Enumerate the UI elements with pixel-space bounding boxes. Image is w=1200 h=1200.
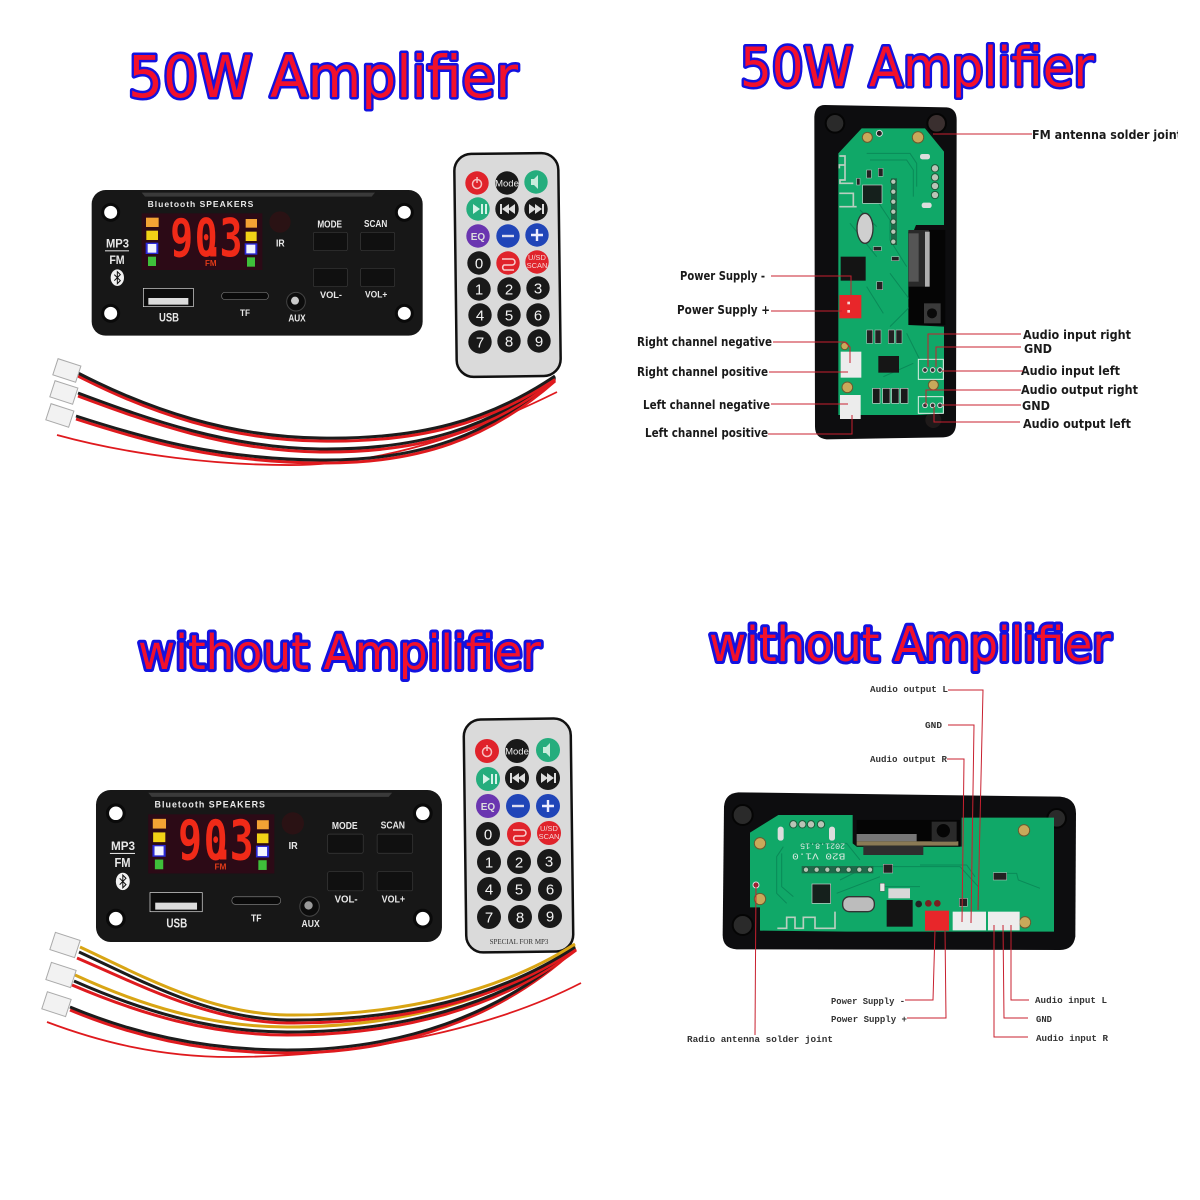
panel: 50W remote control: 8 — [505, 334, 513, 350]
display: 90.3 FM: FM — [214, 861, 227, 871]
callouts: 50W board pin labels: Audio input right — [1023, 327, 1131, 342]
panel: without-amplifier module front: TF — [251, 913, 262, 924]
sd card slot — [908, 230, 945, 325]
panel: without-amplifier remote control: 8 — [516, 910, 524, 926]
display: 90.3 FM — [142, 207, 262, 270]
display: 90.3 FM: 90.3 — [170, 207, 243, 269]
panel: 50W module front: MP3 — [106, 237, 129, 250]
callouts: 50W board pin labels: Left channel positive — [645, 425, 768, 440]
display: 90.3 FM: 90.3 — [178, 810, 254, 873]
callouts: without-amplifier board pin labels: GND — [925, 720, 942, 731]
panel: 50W module front: AUX — [288, 313, 306, 324]
callouts: 50W board pin labels — [637, 127, 1182, 440]
icon: bluetooth — [116, 873, 130, 890]
panel: 50W module front: FM — [109, 253, 125, 267]
callouts: without-amplifier board pin labels: Audio input L — [1035, 995, 1107, 1006]
title: 50W Amplifier (right): 50W Amplifier — [740, 36, 1095, 99]
panel: without-amplifier module front — [96, 790, 442, 942]
callouts: without-amplifier board pin labels: Audio output L — [870, 684, 948, 695]
panel: without-amplifier remote control: 4 — [485, 882, 493, 898]
panel: without-amplifier remote control: 5 — [515, 882, 523, 898]
panel: without-amplifier module front: VOL+ — [382, 894, 405, 905]
panel: 50W remote control: 7 — [476, 334, 484, 352]
panel: without-amplifier remote control: U/SD — [540, 824, 559, 833]
panel: without-amplifier module front: SCAN — [381, 821, 405, 832]
sd card slot — [857, 820, 960, 855]
panel: 50W remote control: Mode — [495, 178, 519, 190]
display: 90.3 FM: FM — [205, 259, 217, 268]
callouts: 50W board pin labels: Power Supply + — [677, 302, 770, 317]
panel: 50W module front: VOL+ — [365, 290, 388, 300]
panel: 50W module front: SCAN — [364, 219, 387, 230]
panel: 50W remote control: 4 — [476, 308, 484, 324]
panel: without-amplifier module front: FM — [114, 855, 130, 870]
callouts: 50W board pin labels: Audio output right — [1021, 382, 1138, 397]
title: 50W Amplifier (left): 50W Amplifier — [128, 43, 518, 111]
cable set: 50W wires — [46, 359, 557, 465]
callouts: 50W board pin labels: GND — [1024, 341, 1052, 356]
panel: 50W remote control: 2 — [505, 282, 513, 298]
panel: without-amplifier remote control: 0 — [484, 826, 492, 844]
callouts: 50W board pin labels: Right channel positive — [637, 364, 768, 379]
panel: without-amplifier remote control: 6 — [546, 882, 554, 898]
panel: without-amplifier module front: USB — [166, 915, 187, 930]
panel: 50W remote control: 5 — [505, 308, 513, 324]
panel: without-amplifier module front: MODE — [332, 821, 358, 832]
icon: bluetooth — [111, 269, 124, 286]
usb port — [143, 288, 193, 307]
panel: without-amplifier remote control: 9 — [546, 908, 554, 926]
callouts: 50W board pin labels: Left channel negative — [643, 397, 770, 412]
panel: without-amplifier module front: Bluetooth SPEAKERS — [155, 800, 266, 810]
panel: 50W module front: Bluetooth SPEAKERS — [148, 199, 254, 209]
panel: 50W remote control: SCAN — [527, 261, 547, 270]
title: without Ampilifier (right): without Ampilifier — [709, 617, 1111, 673]
panel: without-amplifier remote control: SPECIAL FOR MP3 — [490, 938, 549, 946]
callouts: without-amplifier board pin labels: Power Supply + — [831, 1014, 907, 1025]
callouts: 50W board pin labels: Right channel negative — [637, 334, 772, 349]
callouts: without-amplifier board pin labels: Audio input R — [1036, 1033, 1108, 1044]
panel: 50W module front — [92, 190, 423, 336]
callouts: 50W board pin labels: GND — [1022, 398, 1050, 413]
panel: 50W remote control: EQ — [471, 232, 485, 243]
panel: without-amplifier remote control: 3 — [545, 854, 553, 870]
panel: without-amplifier module front: VOL- — [335, 895, 358, 906]
panel: without-amplifier remote control: 7 — [485, 910, 493, 926]
panel: 50W module front: USB — [159, 311, 179, 325]
cable set: without-amplifier wires — [42, 932, 581, 1057]
callouts: without-amplifier board pin labels: Radio antenna solder joint — [687, 1034, 833, 1045]
callouts: without-amplifier board pin labels — [687, 684, 1108, 1045]
panel: without-amplifier board back — [723, 792, 1076, 950]
panel: 50W board back — [814, 105, 957, 439]
panel: 50W remote control: 0 — [475, 256, 483, 272]
panel: 50W remote control: 9 — [535, 334, 543, 350]
panel: 50W module front: VOL- — [320, 290, 342, 300]
callouts: 50W board pin labels: Power Supply - — [680, 268, 765, 283]
panel: 50W remote control: 3 — [534, 280, 542, 298]
green circuit board — [838, 128, 944, 415]
panel: 50W remote control: 1 — [475, 282, 483, 298]
callouts: without-amplifier board pin labels: Power Supply - — [831, 996, 905, 1007]
title: without Ampilifier (left): without Ampilifier — [138, 625, 541, 681]
green circuit board — [750, 815, 1054, 932]
callouts: 50W board pin labels: FM antenna solder joint — [1032, 127, 1182, 142]
usb port — [150, 893, 202, 912]
panel: without-amplifier remote control: SCAN — [539, 832, 559, 841]
panel: without-amplifier board back: B20 V1.0 — [792, 851, 845, 862]
callouts: without-amplifier board pin labels: Audio output R — [870, 754, 947, 765]
panel: without-amplifier module front: AUX — [302, 919, 320, 930]
panel: 50W remote control — [454, 153, 561, 377]
panel: 50W remote control: 6 — [534, 308, 542, 324]
display: 90.3 FM — [148, 810, 274, 873]
callouts: 50W board pin labels: Audio output left — [1023, 416, 1131, 431]
callouts: without-amplifier board pin labels: GND — [1036, 1014, 1052, 1025]
panel: 50W module front: MODE — [317, 219, 342, 230]
panel: 50W module front: TF — [240, 308, 250, 318]
panel: without-amplifier module front: IR — [289, 841, 298, 852]
white margin at right edge clipping the FM label — [1178, 120, 1200, 150]
panel: without-amplifier module front: MP3 — [111, 839, 135, 853]
panel: without-amplifier remote control: 2 — [515, 854, 523, 872]
panel: without-amplifier board back: 2021.8.15 — [800, 841, 845, 851]
callouts: 50W board pin labels: Audio input left — [1021, 363, 1120, 378]
panel: 50W module front: IR — [276, 239, 285, 250]
panel: 50W remote control: U/SD — [528, 253, 547, 262]
panel: without-amplifier remote control: 1 — [485, 854, 493, 872]
panel: without-amplifier remote control: Mode — [505, 746, 529, 758]
panel: without-amplifier remote control: EQ — [481, 802, 495, 813]
panel: without-amplifier remote control — [464, 718, 573, 953]
